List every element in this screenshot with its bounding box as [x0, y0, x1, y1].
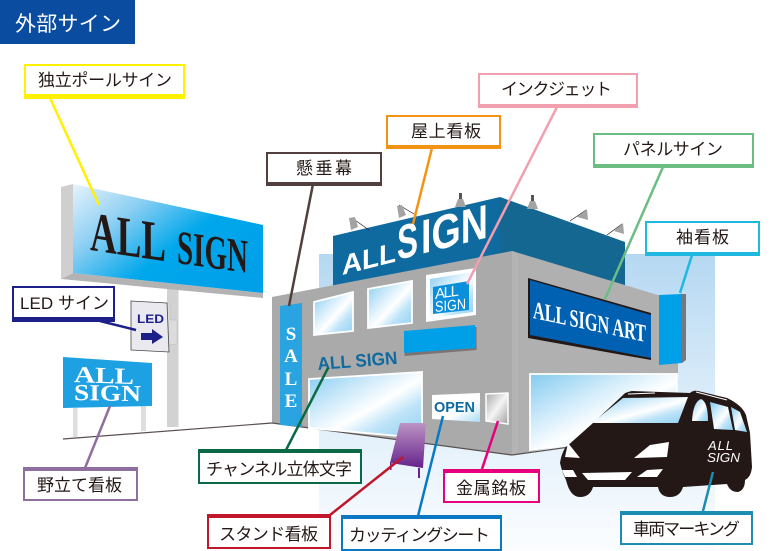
SALE banner: A — [284, 346, 298, 367]
SALE banner: E — [285, 391, 297, 412]
label: pole sign — [24, 64, 185, 99]
label: cutting sheet: カッティングシート — [349, 526, 490, 545]
upper windows — [309, 281, 422, 438]
label: LED sign: LED サイン — [20, 294, 109, 313]
label: roadside billboard — [23, 467, 138, 501]
large storefront window — [530, 374, 677, 450]
rooftop sign: S — [397, 212, 418, 271]
metal plate — [486, 393, 508, 424]
label: cutting sheet — [341, 515, 502, 551]
cutting sheet sign OPEN: OPEN — [434, 399, 475, 416]
inkjet sign: SIGN — [435, 296, 466, 316]
pole sign: ALL — [90, 201, 166, 274]
label: roadside billboard: 野立て看板 — [37, 476, 122, 495]
vehicle: ALL — [707, 438, 733, 453]
LED sign — [131, 301, 177, 352]
SALE banner: L — [285, 369, 297, 390]
LED sign: LED — [137, 312, 164, 326]
label: projecting sign — [645, 221, 760, 256]
label: channel letters — [198, 449, 362, 484]
projecting sign — [659, 294, 686, 365]
label: rooftop sign — [386, 115, 501, 149]
heading — [0, 0, 135, 44]
label: banner — [266, 152, 382, 186]
label: banner: 懸垂幕 — [296, 159, 352, 178]
panel sign: ALL SIGN ART — [533, 296, 646, 348]
spotlights — [349, 193, 624, 235]
stand sign — [390, 423, 426, 478]
label: panel sign: パネルサイン — [623, 140, 723, 159]
pole sign — [61, 184, 263, 427]
inkjet sign: ALL — [435, 283, 459, 303]
label: rooftop sign: 屋上看板 — [411, 122, 481, 141]
ground line — [63, 423, 272, 439]
SALE banner — [280, 303, 302, 427]
roadside billboard: ALL — [74, 362, 134, 389]
leader lines — [50, 98, 713, 516]
label: channel letters: チャンネル立体文字 — [206, 460, 352, 479]
heading: 外部サイン — [15, 13, 121, 36]
roadside billboard — [63, 357, 152, 437]
label: metal plate — [443, 469, 540, 503]
label: pole sign: 独立ポールサイン — [38, 71, 172, 90]
cutting sheet sign OPEN — [432, 393, 480, 422]
panel sign — [528, 278, 651, 360]
label: projecting sign: 袖看板 — [676, 228, 729, 247]
inkjet sign — [426, 268, 476, 322]
blue fascia band — [404, 325, 477, 356]
pole sign: SIGN — [177, 221, 248, 284]
label: metal plate: 金属銘板 — [456, 479, 526, 498]
roadside billboard: SIGN — [74, 380, 141, 406]
SALE banner: S — [286, 324, 296, 345]
building — [272, 251, 678, 455]
rooftop sign: IGN — [421, 195, 488, 265]
label: LED sign — [12, 286, 115, 322]
label: inkjet: インクジェット — [501, 80, 612, 99]
label: panel sign — [593, 133, 754, 168]
vehicle: SIGN — [707, 450, 741, 465]
label: vehicle marking: 車両マーキング — [633, 520, 740, 539]
label: stand sign — [207, 514, 331, 549]
label: vehicle marking — [620, 511, 753, 545]
channel letters: ALL SIGN — [317, 348, 398, 374]
label: stand sign: スタンド看板 — [219, 525, 318, 544]
rooftop sign — [333, 195, 625, 290]
vehicle — [560, 391, 752, 497]
pale blue backdrop — [319, 254, 715, 551]
label: inkjet — [478, 73, 638, 108]
rooftop sign: ALL — [342, 237, 396, 282]
